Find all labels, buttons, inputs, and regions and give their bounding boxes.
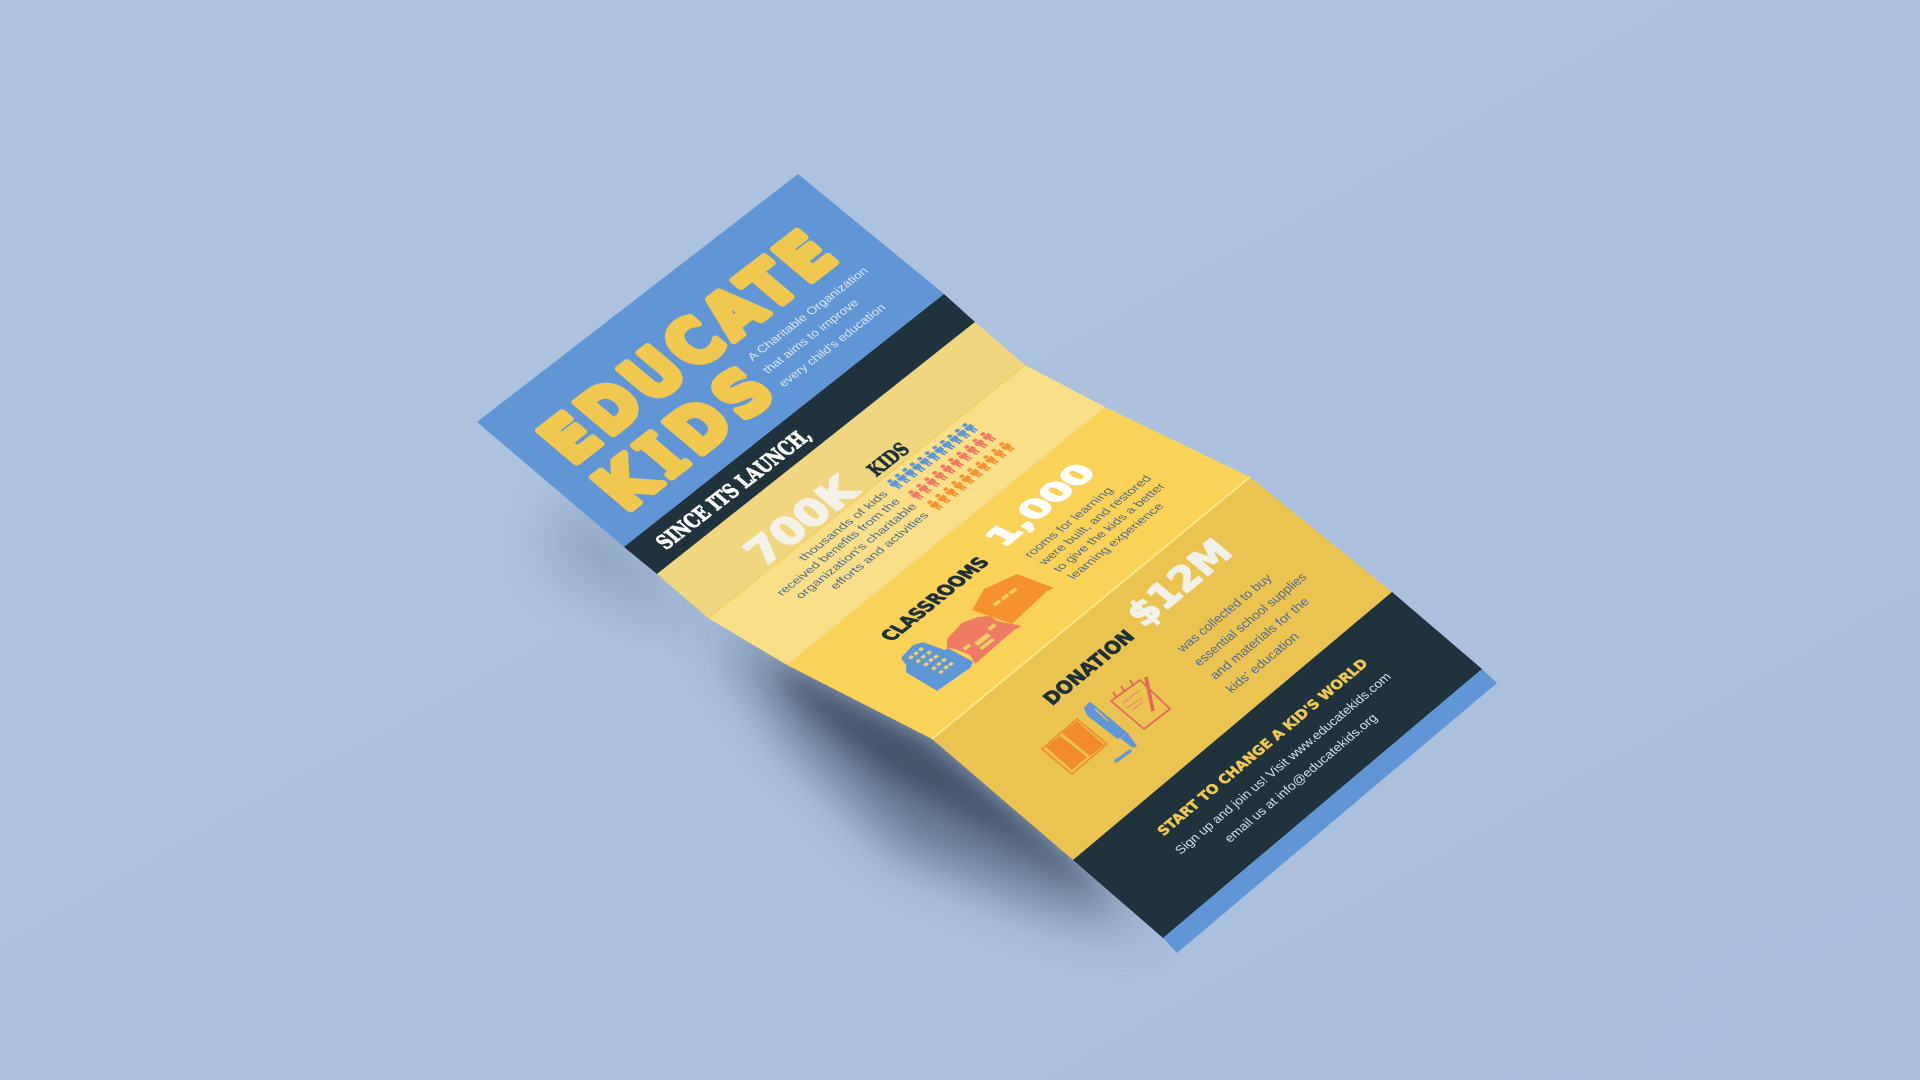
body text: donation: and materials for the bbox=[1207, 595, 1313, 682]
since its launch heading: SINCE ITS LAUNCH, bbox=[650, 423, 817, 554]
stat: 1,000: 1,000 bbox=[977, 459, 1105, 552]
body text: classrooms bbox=[1020, 466, 1184, 582]
label: KIDS: KIDS bbox=[863, 439, 915, 481]
brochure bbox=[477, 174, 1497, 953]
contact text: email us at info@educatekids.org bbox=[1222, 712, 1381, 845]
title: KIDS bbox=[577, 354, 789, 523]
contact text: Sign up and join us! Visit www.educatekids.com bbox=[1172, 670, 1395, 857]
orange building bbox=[972, 574, 1054, 624]
header and first-fold text bbox=[521, 213, 1009, 605]
subtitle: that aims to improve bbox=[760, 296, 861, 376]
stat: $12M: $12M bbox=[1117, 531, 1241, 634]
orange row bbox=[925, 441, 1016, 511]
icon: fountain pen bbox=[1085, 703, 1137, 761]
panel: fold 2 bbox=[708, 365, 1105, 665]
body text: kids: received benefits from the bbox=[773, 496, 904, 598]
panel: footer bbox=[1073, 592, 1482, 938]
body text: kids: thousands of kids bbox=[796, 489, 891, 563]
stat: 700K: 700K bbox=[735, 467, 869, 574]
panel: dark band bbox=[624, 294, 975, 574]
body text: donation bbox=[1174, 557, 1342, 696]
body text: kids: efforts and activities bbox=[827, 510, 932, 591]
body text: donation: essential school supplies bbox=[1191, 571, 1310, 669]
panel: fold 3 bbox=[787, 407, 1250, 739]
body text: donation: kids' education bbox=[1223, 630, 1303, 696]
body text: donation: was collected to buy bbox=[1174, 572, 1276, 656]
body text: classrooms: to give the kids a better bbox=[1049, 481, 1169, 574]
icon: open book bbox=[1042, 719, 1107, 774]
label: CLASSROOMS: CLASSROOMS bbox=[875, 554, 995, 644]
body text: kids: organization's charitable bbox=[792, 501, 920, 601]
panel: fold 4 bbox=[932, 477, 1392, 860]
subtitle: A Charitable Organization bbox=[744, 264, 871, 363]
call to action heading: START TO CHANGE A KID'S WORLD bbox=[1154, 655, 1371, 839]
red row bbox=[906, 431, 997, 501]
icon: notepad and pencil bbox=[1111, 677, 1170, 729]
panel: blue header bbox=[477, 174, 944, 547]
body text: classrooms: learning experience bbox=[1064, 501, 1167, 581]
panel: fold 1 bbox=[657, 322, 1025, 618]
icon: people pictogram bbox=[885, 422, 1016, 511]
subtitle bbox=[744, 264, 902, 389]
footer text bbox=[1151, 652, 1412, 872]
icon: school buildings bbox=[902, 574, 1054, 690]
blue building bbox=[902, 643, 972, 690]
blue row bbox=[885, 422, 979, 490]
red building bbox=[947, 616, 1022, 664]
body text: classrooms: rooms for learning bbox=[1020, 485, 1116, 559]
panel: bottom strip bbox=[1163, 669, 1497, 953]
label: DONATION: DONATION bbox=[1039, 626, 1140, 710]
subtitle: every child's education bbox=[775, 301, 888, 389]
donation section text bbox=[1024, 513, 1342, 776]
body text: classrooms: were built, and restored bbox=[1034, 473, 1155, 567]
cast shadows bbox=[550, 490, 1150, 930]
title: EDUCATE bbox=[524, 219, 851, 476]
body text: kids bbox=[761, 487, 934, 613]
classrooms section text bbox=[863, 446, 1184, 676]
